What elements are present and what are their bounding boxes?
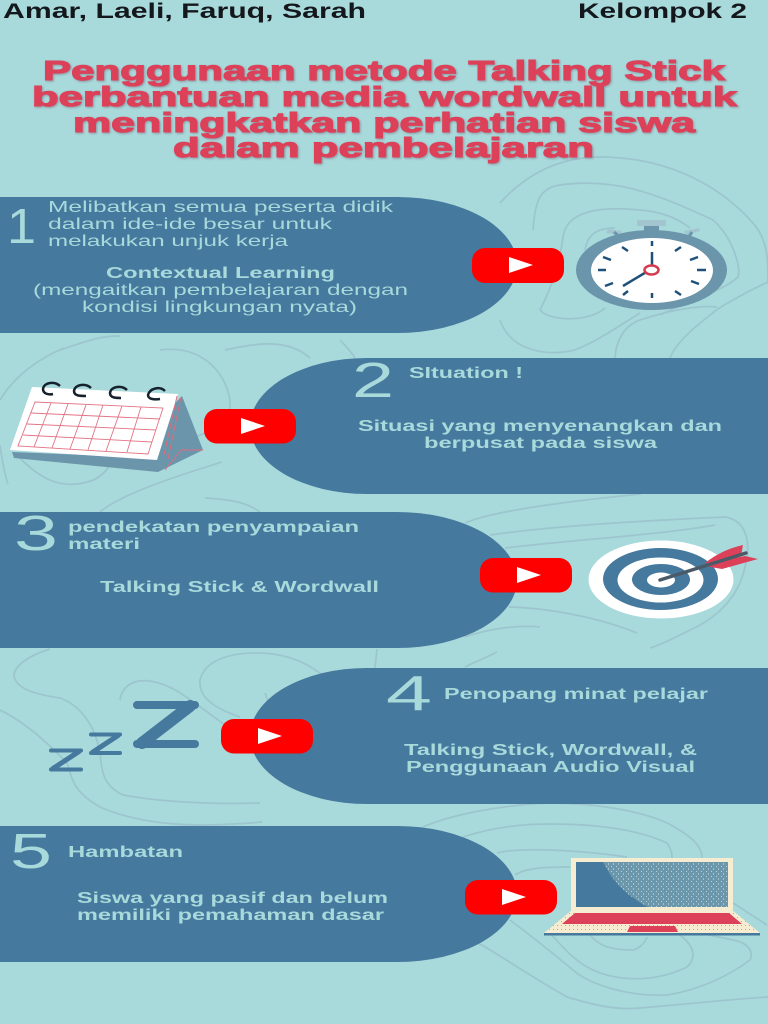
icon: play button 4 (221, 719, 313, 754)
panel: step 1 (0, 197, 517, 333)
step 5 heading: Hambatan (68, 844, 183, 861)
step 2 description (358, 418, 722, 452)
step 2 number: 2 (352, 354, 394, 408)
step 1 detail: kondisi lingkungan nyata) (82, 299, 357, 316)
step 5 background (0, 826, 517, 962)
title: meningkatkan perhatian siswa (73, 107, 696, 138)
step 3 background (0, 512, 517, 648)
step 4 description: Talking Stick, Wordwall, & (404, 742, 698, 759)
step 1 detail: (mengaitkan pembelajaran dengan (33, 282, 408, 299)
step 1 description: Melibatkan semua peserta didik (48, 199, 395, 216)
step 3 heading: materi (68, 536, 140, 553)
header: group number: Kelompok 2 (578, 0, 747, 23)
icon: play button 1 (472, 248, 564, 283)
step 5 description (77, 890, 388, 924)
step 1 detail (33, 265, 408, 316)
panel: step 3 (0, 507, 517, 648)
header: group members: Amar, Laeli, Faruq, Sarah (3, 0, 366, 23)
panel: step 5 (0, 825, 517, 962)
step 4 heading: Penopang minat pelajar (444, 686, 708, 703)
title: Penggunaan metode Talking Stick (43, 55, 726, 86)
icon: laptop (544, 858, 760, 936)
step 1 description: dalam ide-ide besar untuk (48, 216, 334, 233)
step 2 heading: SItuation ! (409, 365, 523, 382)
step 4 description (404, 742, 698, 776)
step 2 description: berpusat pada siswa (424, 435, 657, 452)
icon: desk calendar (10, 383, 203, 472)
panel: step 4 (250, 667, 768, 804)
panel: step 2 (250, 354, 768, 494)
step 4 description: Penggunaan Audio Visual (406, 759, 695, 776)
step 5 number: 5 (10, 825, 52, 879)
step 3 description: Talking Stick & Wordwall (100, 579, 379, 596)
icon: play button 2 (204, 409, 296, 444)
step 1 description (48, 199, 395, 250)
step 1 detail: Contextual Learning (106, 265, 335, 282)
icon: play button 5 (465, 880, 557, 914)
step 5 description: memiliki pemahaman dasar (77, 907, 384, 924)
step 1 background (0, 197, 517, 333)
icon: sleeping zzz (51, 705, 195, 770)
step 3 number: 3 (14, 507, 58, 561)
title: dalam pembelajaran (173, 132, 594, 163)
step 2 background (250, 358, 768, 494)
icon: play button 3 (480, 558, 572, 592)
step 1 description: melakukan unjuk kerja (48, 233, 288, 250)
step 4 number: 4 (386, 667, 432, 721)
icon: target with arrow (588, 540, 758, 618)
icon: stopwatch (576, 220, 727, 310)
title: berbantuan media wordwall untuk (32, 81, 738, 112)
step 1 number: 1 (7, 200, 36, 254)
step 5 description: Siswa yang pasif dan belum (77, 890, 388, 907)
step 3 heading (68, 519, 359, 553)
step 3 heading: pendekatan penyampaian (68, 519, 359, 536)
step 4 background (250, 668, 768, 804)
step 2 description: Situasi yang menyenangkan dan (358, 418, 722, 435)
title (32, 55, 738, 163)
